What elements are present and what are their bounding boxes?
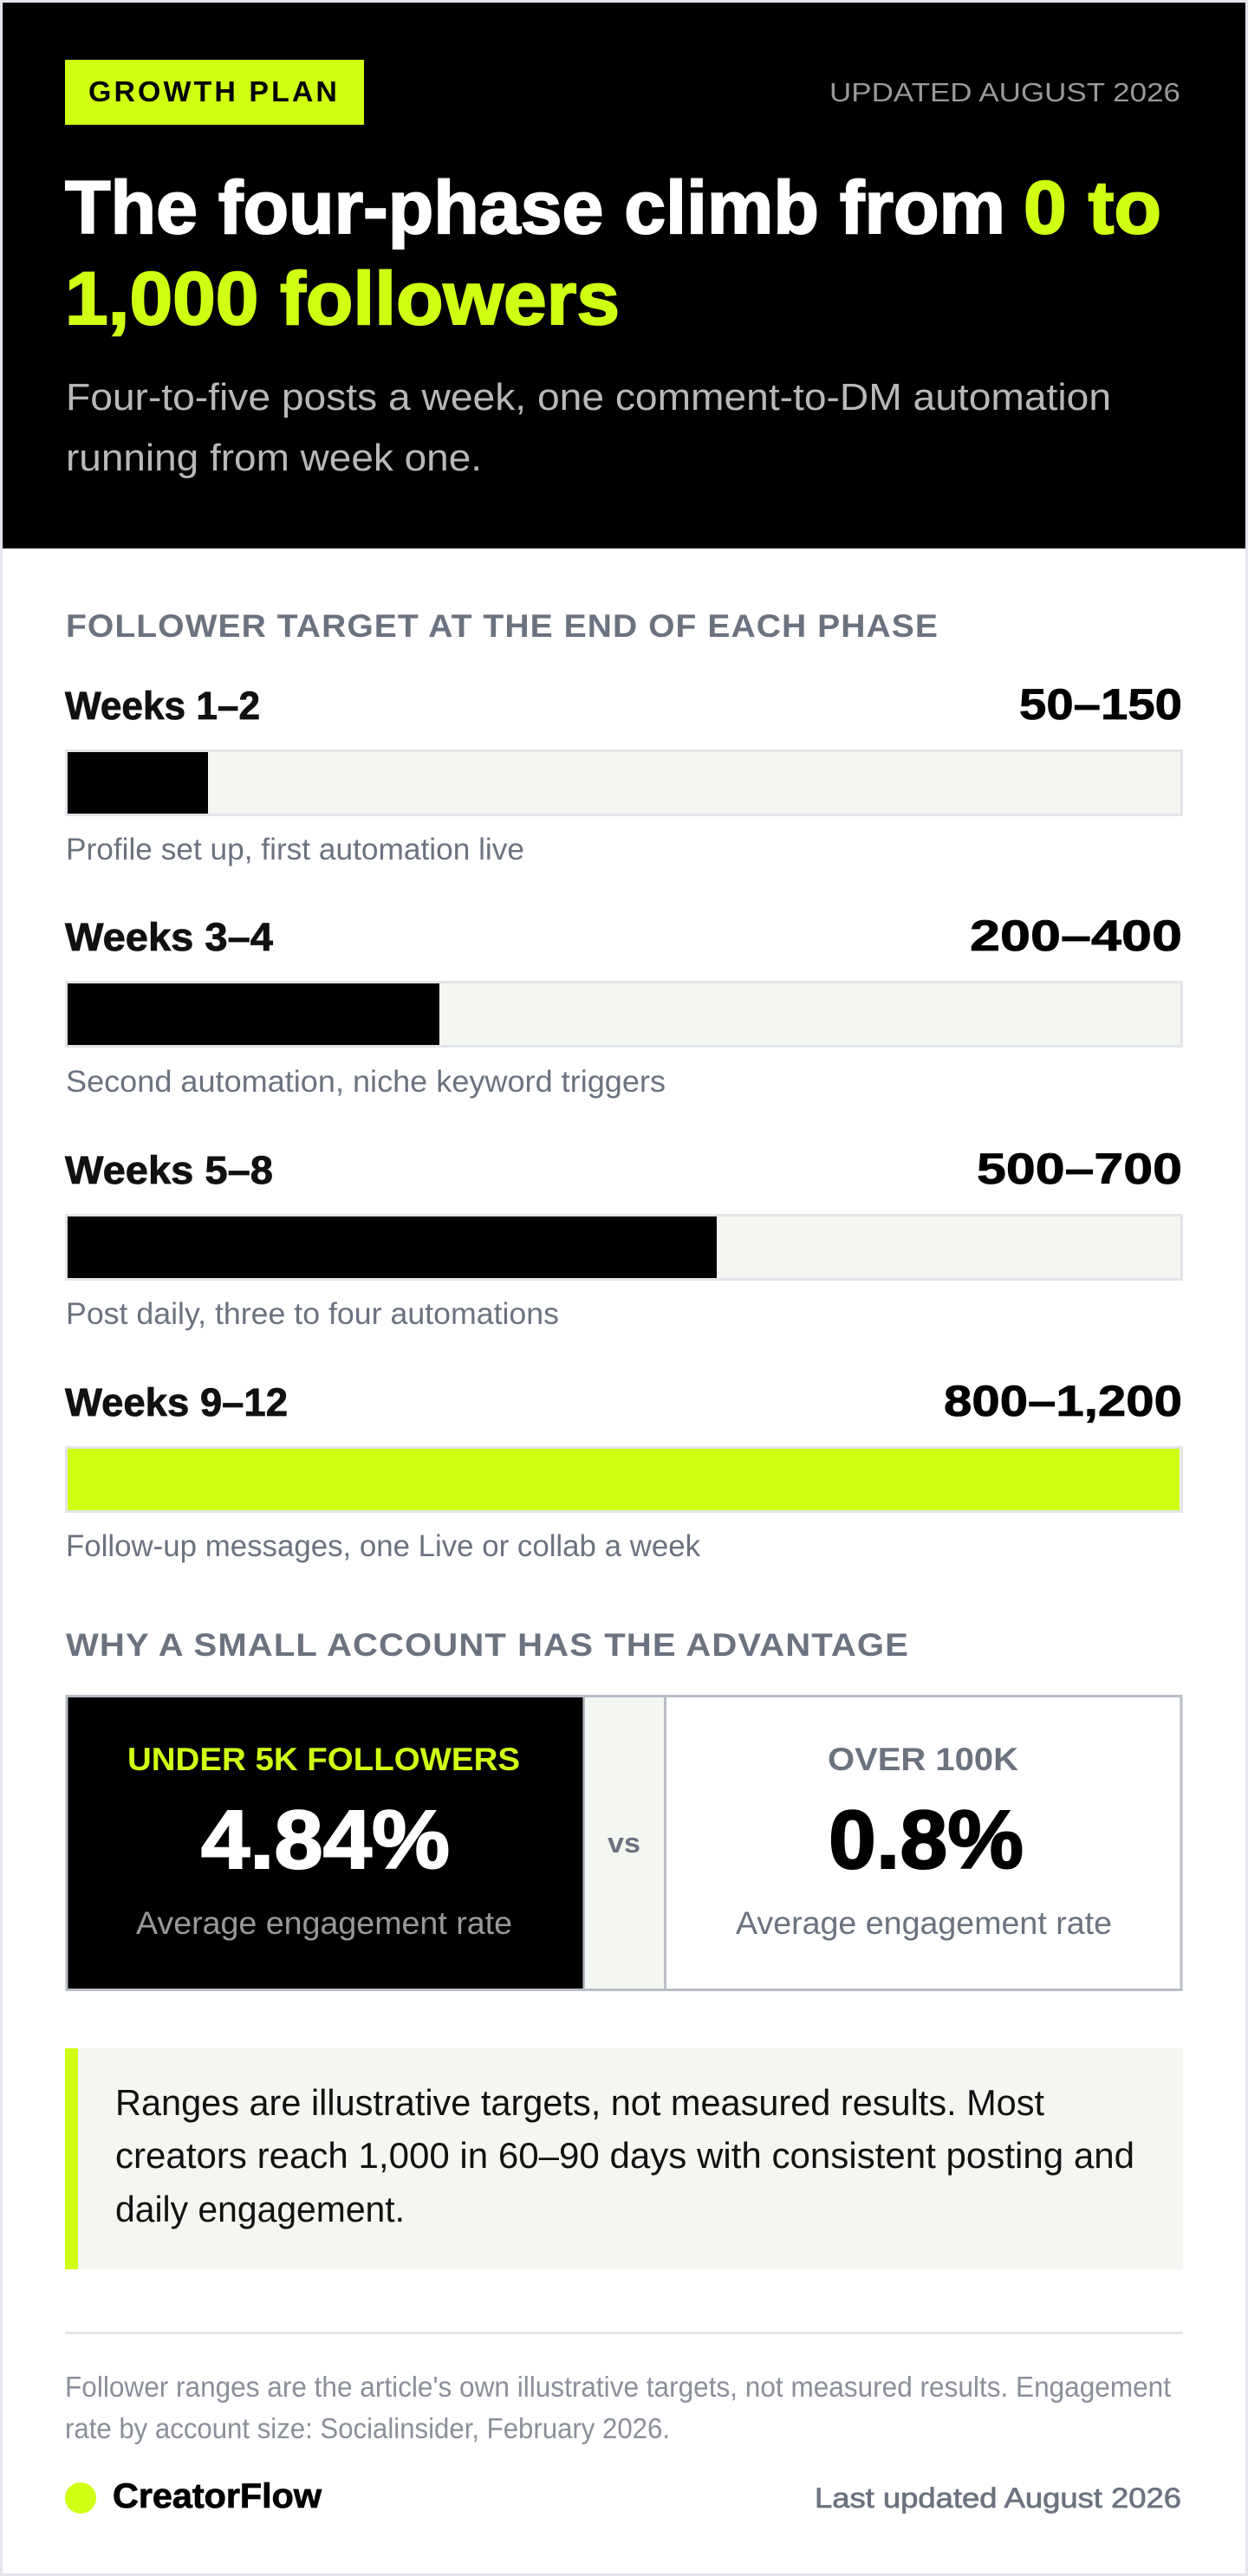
heading: follower target: FOLLOWER TARGET AT THE END OF EACH PHASE — [66, 608, 939, 644]
footnote: rate by account size: Socialinsider, February 2026. — [65, 2412, 670, 2444]
row: weeks 1-2 — [65, 680, 1182, 866]
callout: illustrative targets: daily engagement. — [115, 2189, 405, 2229]
row: weeks 1-2: Weeks 1–2 — [65, 684, 260, 728]
row: weeks 9-12: Weeks 9–12 — [65, 1380, 288, 1424]
vs divider — [582, 1697, 666, 1989]
row: weeks 9-12: 800–1,200 — [944, 1377, 1182, 1425]
row: weeks 3-4: 200–400 — [970, 912, 1182, 960]
row: weeks 3-4: Weeks 3–4 — [65, 915, 273, 959]
badge: growth plan: GROWTH PLAN — [88, 75, 340, 107]
row: weeks 3-4: Second automation, niche keyword triggers — [66, 1065, 666, 1099]
footnote: Follower ranges are the article's own illustrative targets, not measured results. Engagement — [65, 2371, 1171, 2403]
bar chart: follower targets — [65, 680, 1182, 1563]
badge: growth plan — [65, 60, 364, 125]
subtitle — [66, 376, 1111, 479]
subtitle: running from week one. — [66, 437, 482, 479]
callout: illustrative targets: creators reach 1,000 in 60–90 days with consistent posting and — [115, 2135, 1134, 2176]
title: The four-phase climb from — [65, 166, 1005, 250]
card: over 100k: Average engagement rate — [736, 1905, 1112, 1941]
row: weeks 5-8: 500–700 — [977, 1145, 1182, 1193]
row: weeks 5-8: Weeks 5–8 — [65, 1148, 273, 1192]
footnote — [65, 2371, 1171, 2444]
last updated: Last updated August 2026 — [815, 2482, 1181, 2514]
row: weeks 1-2: 50–150 — [1019, 680, 1182, 729]
callout: illustrative targets — [65, 2048, 1183, 2269]
row: weeks 5-8 — [65, 1145, 1182, 1331]
row: weeks 3-4 — [65, 912, 1182, 1099]
subtitle: Four-to-five posts a week, one comment-to-DM automation — [66, 376, 1111, 419]
comparison panel — [67, 1697, 1181, 1989]
title — [65, 166, 1161, 341]
card: over 100k — [736, 1742, 1112, 1941]
title: 1,000 followers — [65, 257, 620, 341]
row: weeks 9-12: Follow-up messages, one Live or collab a week — [66, 1529, 700, 1563]
card: under 5k: UNDER 5K FOLLOWERS — [127, 1742, 520, 1777]
panel: header — [3, 3, 1245, 548]
heading: small account advantage: WHY A SMALL ACCOUNT HAS THE ADVANTAGE — [66, 1627, 909, 1663]
row: weeks 1-2: Profile set up, first automation live — [66, 833, 524, 866]
vs divider: vs — [608, 1827, 640, 1859]
card: over 100k: OVER 100K — [828, 1742, 1018, 1777]
card: over 100k: 0.8% — [829, 1794, 1024, 1886]
card: under 5k: Average engagement rate — [136, 1905, 512, 1941]
title: 0 to — [1024, 166, 1161, 250]
date label: UPDATED AUGUST 2026 — [829, 77, 1180, 107]
row: weeks 9-12 — [65, 1377, 1182, 1563]
card: under 5k: 4.84% — [201, 1794, 450, 1886]
callout: illustrative targets: Ranges are illustrative targets, not measured results. Most — [115, 2082, 1044, 2123]
row: weeks 5-8: Post daily, three to four automations — [66, 1297, 559, 1331]
card: under 5k — [68, 1697, 582, 1989]
brand: CreatorFlow: CreatorFlow — [113, 2477, 322, 2515]
